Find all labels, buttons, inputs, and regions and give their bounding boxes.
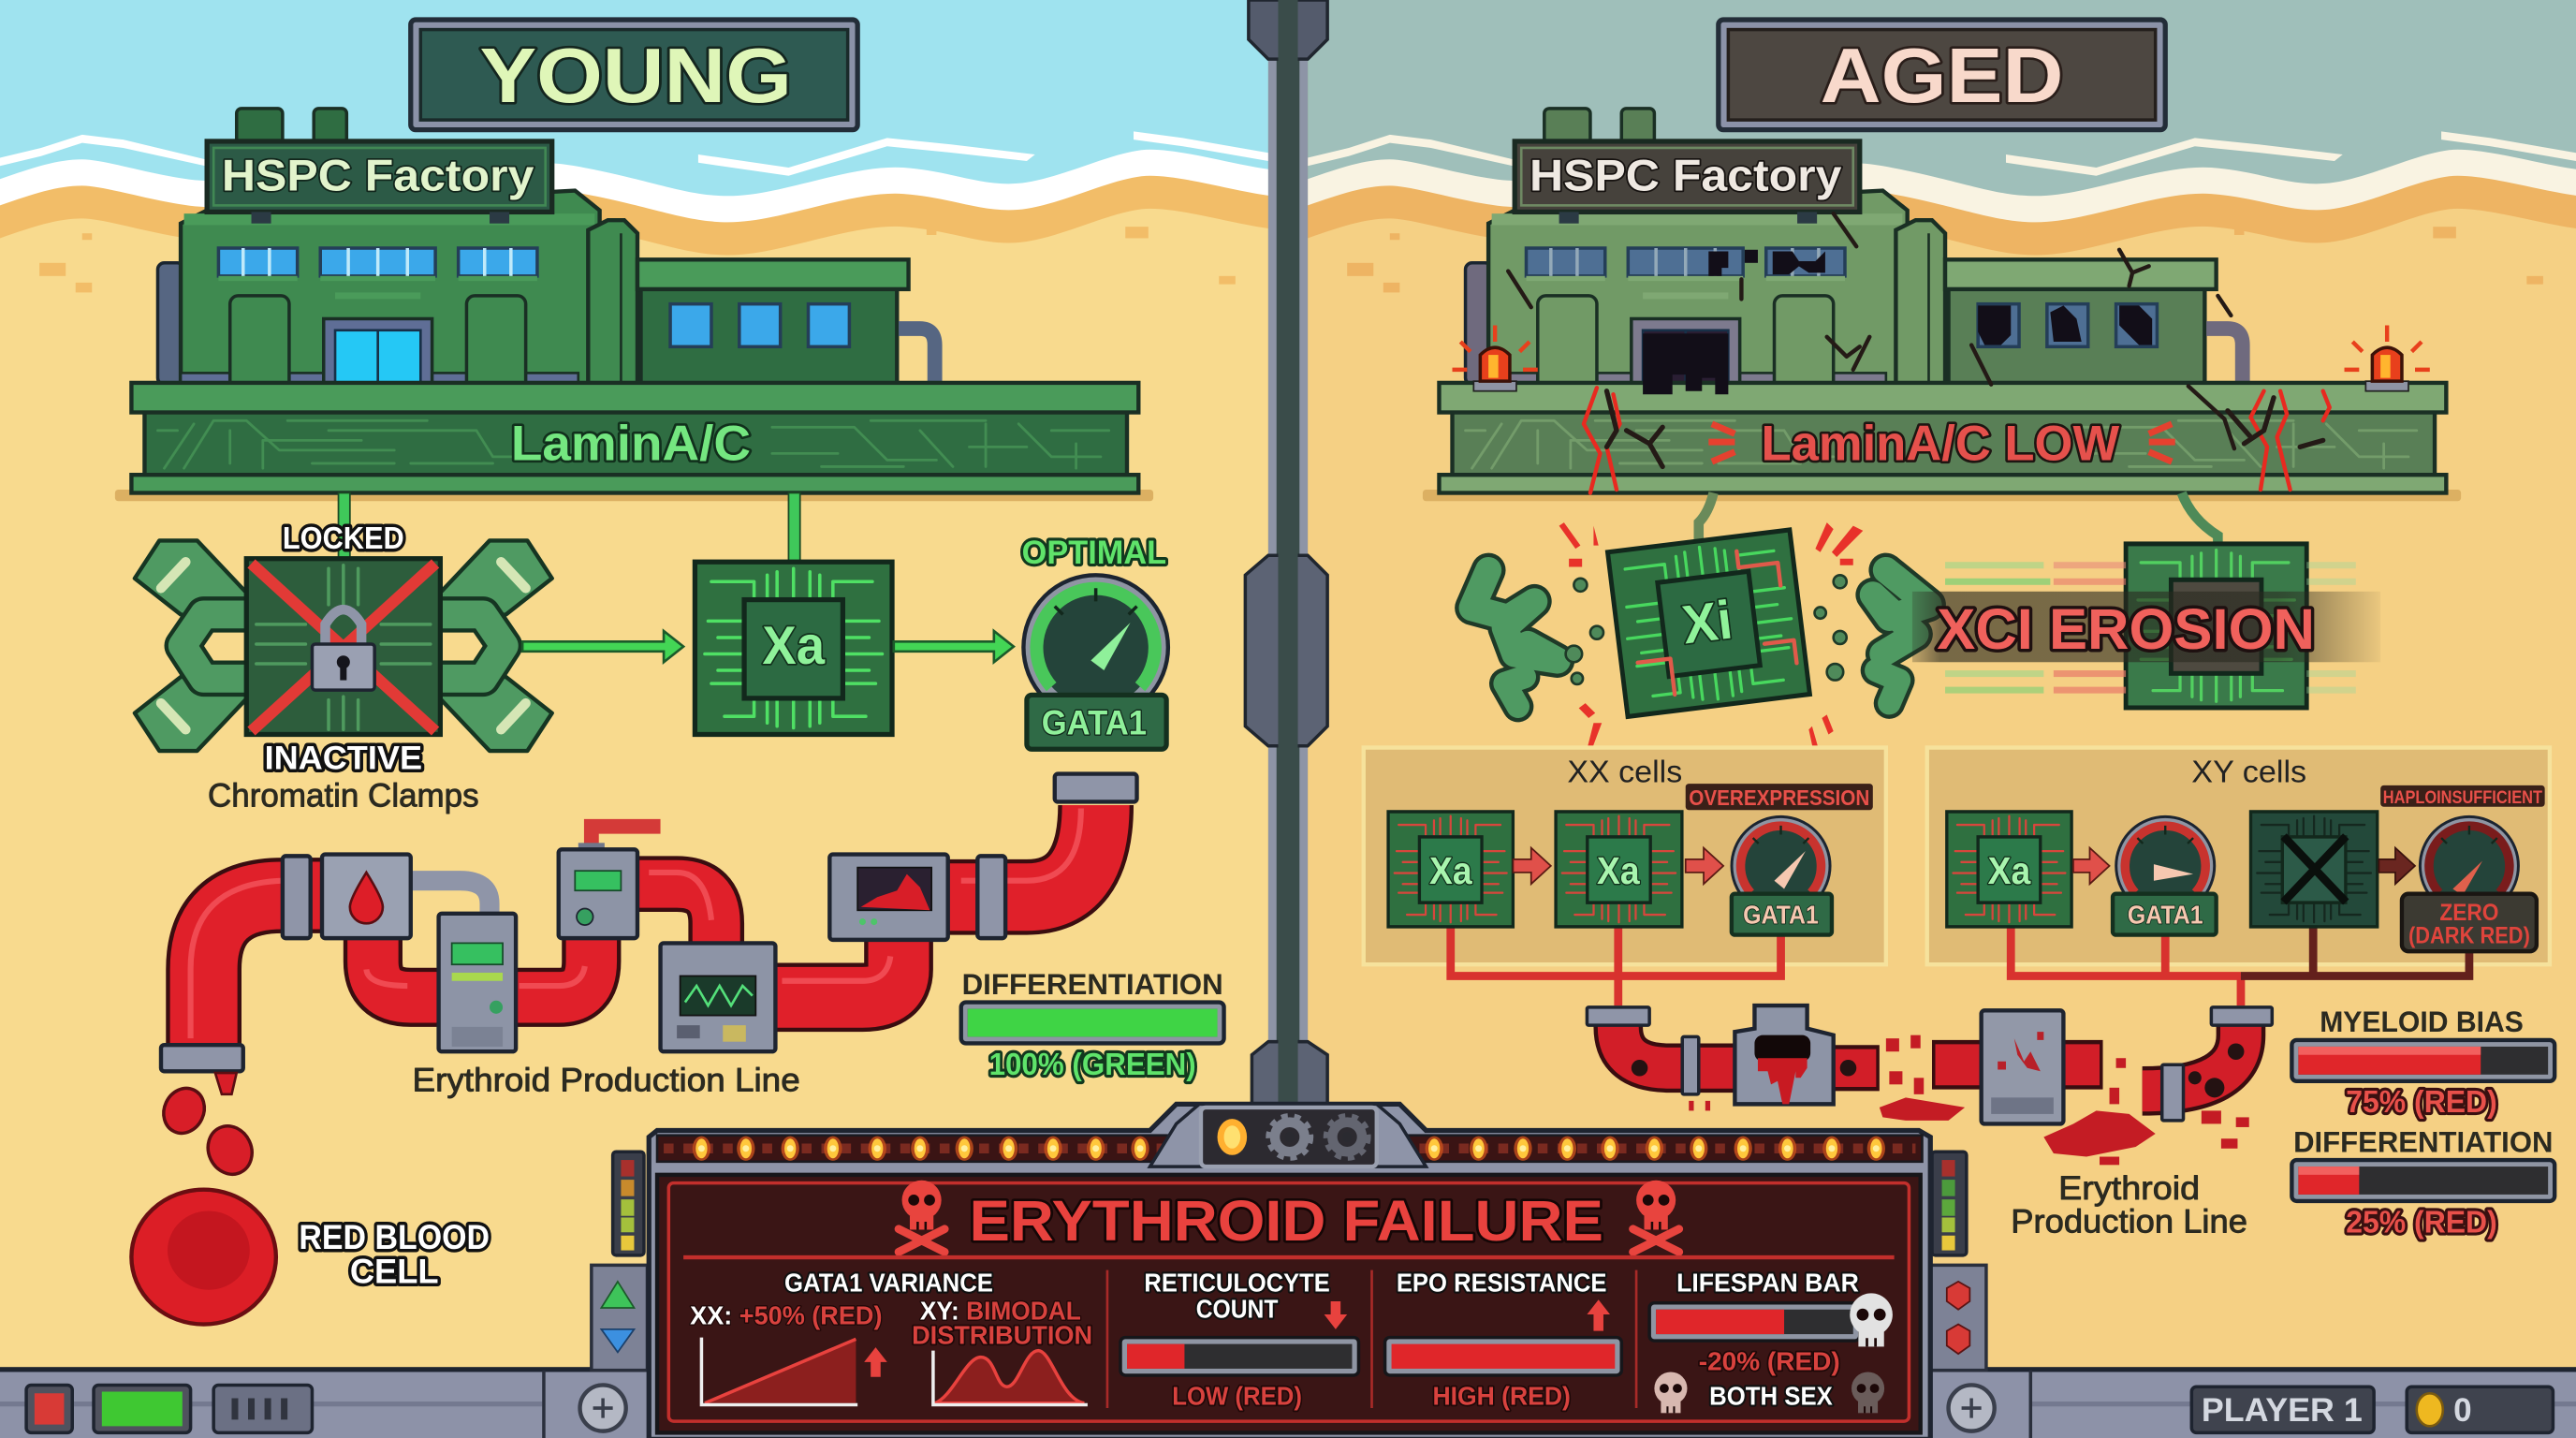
chromatin clamps with locked chip [135, 521, 552, 814]
player 1 badge: PLAYER 1 [2202, 1392, 2363, 1429]
alarm beacon left [1453, 325, 1538, 391]
dark arrow [2378, 848, 2415, 884]
caption: Erythroid [2058, 1170, 2200, 1207]
differentiation 100% meter: 100% (GREEN) [989, 1048, 1196, 1082]
chip: Xa active: Xa [762, 616, 826, 676]
aged differentiation meter: DIFFERENTIATION [2293, 1124, 2553, 1158]
panel: XX cells: XX cells [1567, 755, 1682, 789]
chip Xa 2: Xa [1597, 849, 1640, 892]
title: AGED [1719, 20, 2165, 130]
small skull right [1852, 1372, 1884, 1413]
ERYTHROID FAILURE panel [649, 1104, 1930, 1438]
metric: EPO resistance: EPO RESISTANCE [1397, 1268, 1606, 1297]
machine: blood drop [322, 855, 411, 938]
gauge zero: ZERO [2439, 901, 2499, 926]
right skull and crossbones [1633, 1181, 1679, 1252]
gray button [213, 1385, 312, 1432]
centre module with light and gears [1150, 1104, 1426, 1167]
red blood cell [131, 1190, 490, 1325]
Chromatin Clamps caption: Chromatin Clamps [208, 778, 479, 814]
wires [1451, 927, 1781, 1005]
production line caption: Erythroid Production Line [413, 1062, 800, 1098]
small skull left [1654, 1372, 1687, 1413]
chip Xa 1 [1388, 812, 1513, 927]
broken clamps left [1472, 570, 1558, 707]
panel: XY cells [1927, 748, 2550, 1005]
metric: lifespan bar [1649, 1268, 1893, 1413]
differentiation 100% meter [961, 967, 1224, 1082]
metric: reticulocyte count [1120, 1268, 1358, 1411]
chip Xa 1: Xa [1429, 849, 1472, 892]
arrow: clamps to Xa [522, 631, 683, 662]
central divider pillar [1245, 0, 1327, 1117]
player 1 badge [2191, 1387, 2374, 1432]
title: YOUNG: YOUNG [479, 33, 792, 119]
factory sign: HSPC Factory [222, 152, 534, 201]
metric: lifespan bar: BOTH SEX [1709, 1382, 1833, 1411]
LED strip left [657, 1136, 1183, 1162]
falling red blood cells [156, 1073, 260, 1181]
LED strip right [1397, 1136, 1922, 1162]
chart: rising XX [701, 1338, 857, 1405]
cracks [1508, 213, 2234, 448]
red blood cell: RED BLOOD [299, 1218, 490, 1256]
bottom status bar right [1928, 1367, 2576, 1438]
red button [26, 1385, 72, 1432]
gauge GATA1 low: GATA1 [2128, 900, 2203, 929]
chart: bimodal XY [933, 1351, 1088, 1405]
debris and red sparks [1559, 522, 1863, 753]
down triangle [601, 1329, 634, 1352]
red hex buttons [1947, 1282, 1969, 1354]
gauge: optimal GATA1: GATA1 [1042, 703, 1147, 741]
left panel: young beach background [0, 0, 1268, 1438]
metric: lifespan bar: LIFESPAN BAR [1676, 1268, 1859, 1297]
title: AGED: AGED [1821, 33, 2063, 119]
broken erythroid production line [1587, 1005, 2272, 1240]
LaminA/C LOW label: LaminA/C LOW [1761, 416, 2119, 471]
metric: EPO resistance [1385, 1268, 1621, 1411]
title: YOUNG [411, 20, 857, 130]
metric: reticulocyte count: COUNT [1196, 1295, 1278, 1324]
dead chip [2250, 812, 2378, 927]
coin counter: 0 [2453, 1392, 2472, 1429]
aged differentiation meter [2291, 1124, 2554, 1240]
green button [94, 1385, 191, 1432]
metric: lifespan bar: -20% (RED) [1699, 1347, 1840, 1376]
machine: oscilloscope [661, 943, 775, 1051]
machine: valve [559, 827, 661, 938]
erythroid production line pipes and machines [161, 774, 1137, 1098]
gauge: optimal GATA1: OPTIMAL [1022, 535, 1166, 571]
gauge zero: (DARK RED) [2408, 923, 2530, 948]
young HSPC factory on LaminA/C platform [115, 109, 1153, 501]
machine: green readout tall [439, 914, 516, 1051]
plus knob [1949, 1385, 1995, 1431]
young connectors [339, 493, 800, 565]
broken erythroid production line: Production Line [2011, 1203, 2247, 1240]
coin counter [2407, 1387, 2553, 1432]
blood puddles and fragments [1689, 1035, 2249, 1165]
aged connectors [1699, 493, 2217, 549]
machine: monitor [829, 855, 948, 940]
chip: eroding with XCI EROSION glitch [1912, 544, 2380, 708]
chip: Xi damaged: Xi [1679, 590, 1735, 655]
alarm beacon right [2345, 325, 2430, 391]
broken machine gray [1982, 1010, 2063, 1123]
metric: GATA1 variance: DISTRIBUTION [912, 1321, 1092, 1350]
plus knob [580, 1385, 626, 1431]
aged differentiation meter: 25% (RED) [2346, 1205, 2497, 1240]
left side indicator column [592, 1152, 648, 1371]
red platform fractures [1584, 388, 2330, 493]
aged HSPC factory on cracked LaminA/C platform [1423, 109, 2461, 501]
metric: GATA1 variance: XY: BIMODAL [920, 1296, 1081, 1325]
myeloid bias meter: MYELOID BIAS [2320, 1005, 2524, 1038]
metric: GATA1 variance: GATA1 VARIANCE [784, 1268, 993, 1297]
alert rays around label [1708, 424, 2175, 462]
gauge zero [2402, 816, 2537, 951]
broken machine with hole [1734, 1005, 1834, 1104]
panel: XX cells [1364, 748, 1886, 1005]
metric: reticulocyte count: LOW (RED) [1172, 1382, 1302, 1411]
metric: EPO resistance: HIGH (RED) [1432, 1382, 1571, 1411]
wires [2011, 927, 2241, 1005]
chip: Xi damaged [1607, 530, 1809, 716]
padlock [312, 609, 374, 690]
myeloid bias meter [2291, 1005, 2554, 1120]
chip Xa 2 [1556, 812, 1682, 927]
gauge GATA1 low [2113, 816, 2217, 935]
haploinsufficient tag: HAPLOINSUFFICIENT [2383, 788, 2542, 808]
differentiation 100% meter: DIFFERENTIATION [962, 967, 1223, 1001]
panel: XY cells: XY cells [2191, 755, 2306, 789]
up arrow [864, 1347, 887, 1377]
left skull and crossbones [899, 1181, 944, 1252]
gauge GATA1 high [1732, 816, 1832, 935]
broken window holes [1643, 250, 2152, 394]
myeloid bias meter: 75% (RED) [2346, 1085, 2497, 1120]
INACTIVE label: INACTIVE [265, 740, 422, 776]
chip: Xa active [695, 562, 892, 734]
locked inactive chip [246, 559, 440, 734]
LOCKED label: LOCKED [283, 521, 404, 556]
arrow: Xa to gauge [894, 631, 1014, 662]
panel title: ERYTHROID FAILURE [970, 1189, 1603, 1254]
XCI EROSION label: XCI EROSION [1937, 597, 2315, 662]
metric: reticulocyte count: RETICULOCYTE [1144, 1268, 1330, 1297]
chip Xa [1947, 812, 2071, 927]
large skull [1850, 1293, 1893, 1346]
gauge: optimal GATA1 [1022, 535, 1168, 749]
metric: GATA1 variance: XX: +50% (RED) [690, 1301, 882, 1330]
bottom status bar left [0, 1367, 651, 1438]
red blood cell: CELL [350, 1253, 439, 1291]
metric: GATA1 variance [690, 1268, 1092, 1405]
up triangle [601, 1282, 634, 1308]
right panel: aged beach background [1308, 0, 2576, 1438]
chip Xa: Xa [1988, 849, 2031, 892]
overexpression tag: OVEREXPRESSION [1689, 785, 1869, 810]
platform label: LaminA/C [511, 416, 751, 471]
broken clamps right [1873, 570, 1928, 703]
arrow [2073, 848, 2110, 884]
right side indicator column [1930, 1152, 1986, 1371]
gauge GATA1 high: GATA1 [1743, 900, 1819, 929]
arrow [1686, 848, 1723, 884]
aged sign text: HSPC Factory [1530, 152, 1842, 201]
arrow [1513, 848, 1551, 884]
dark screen [657, 1175, 1921, 1432]
